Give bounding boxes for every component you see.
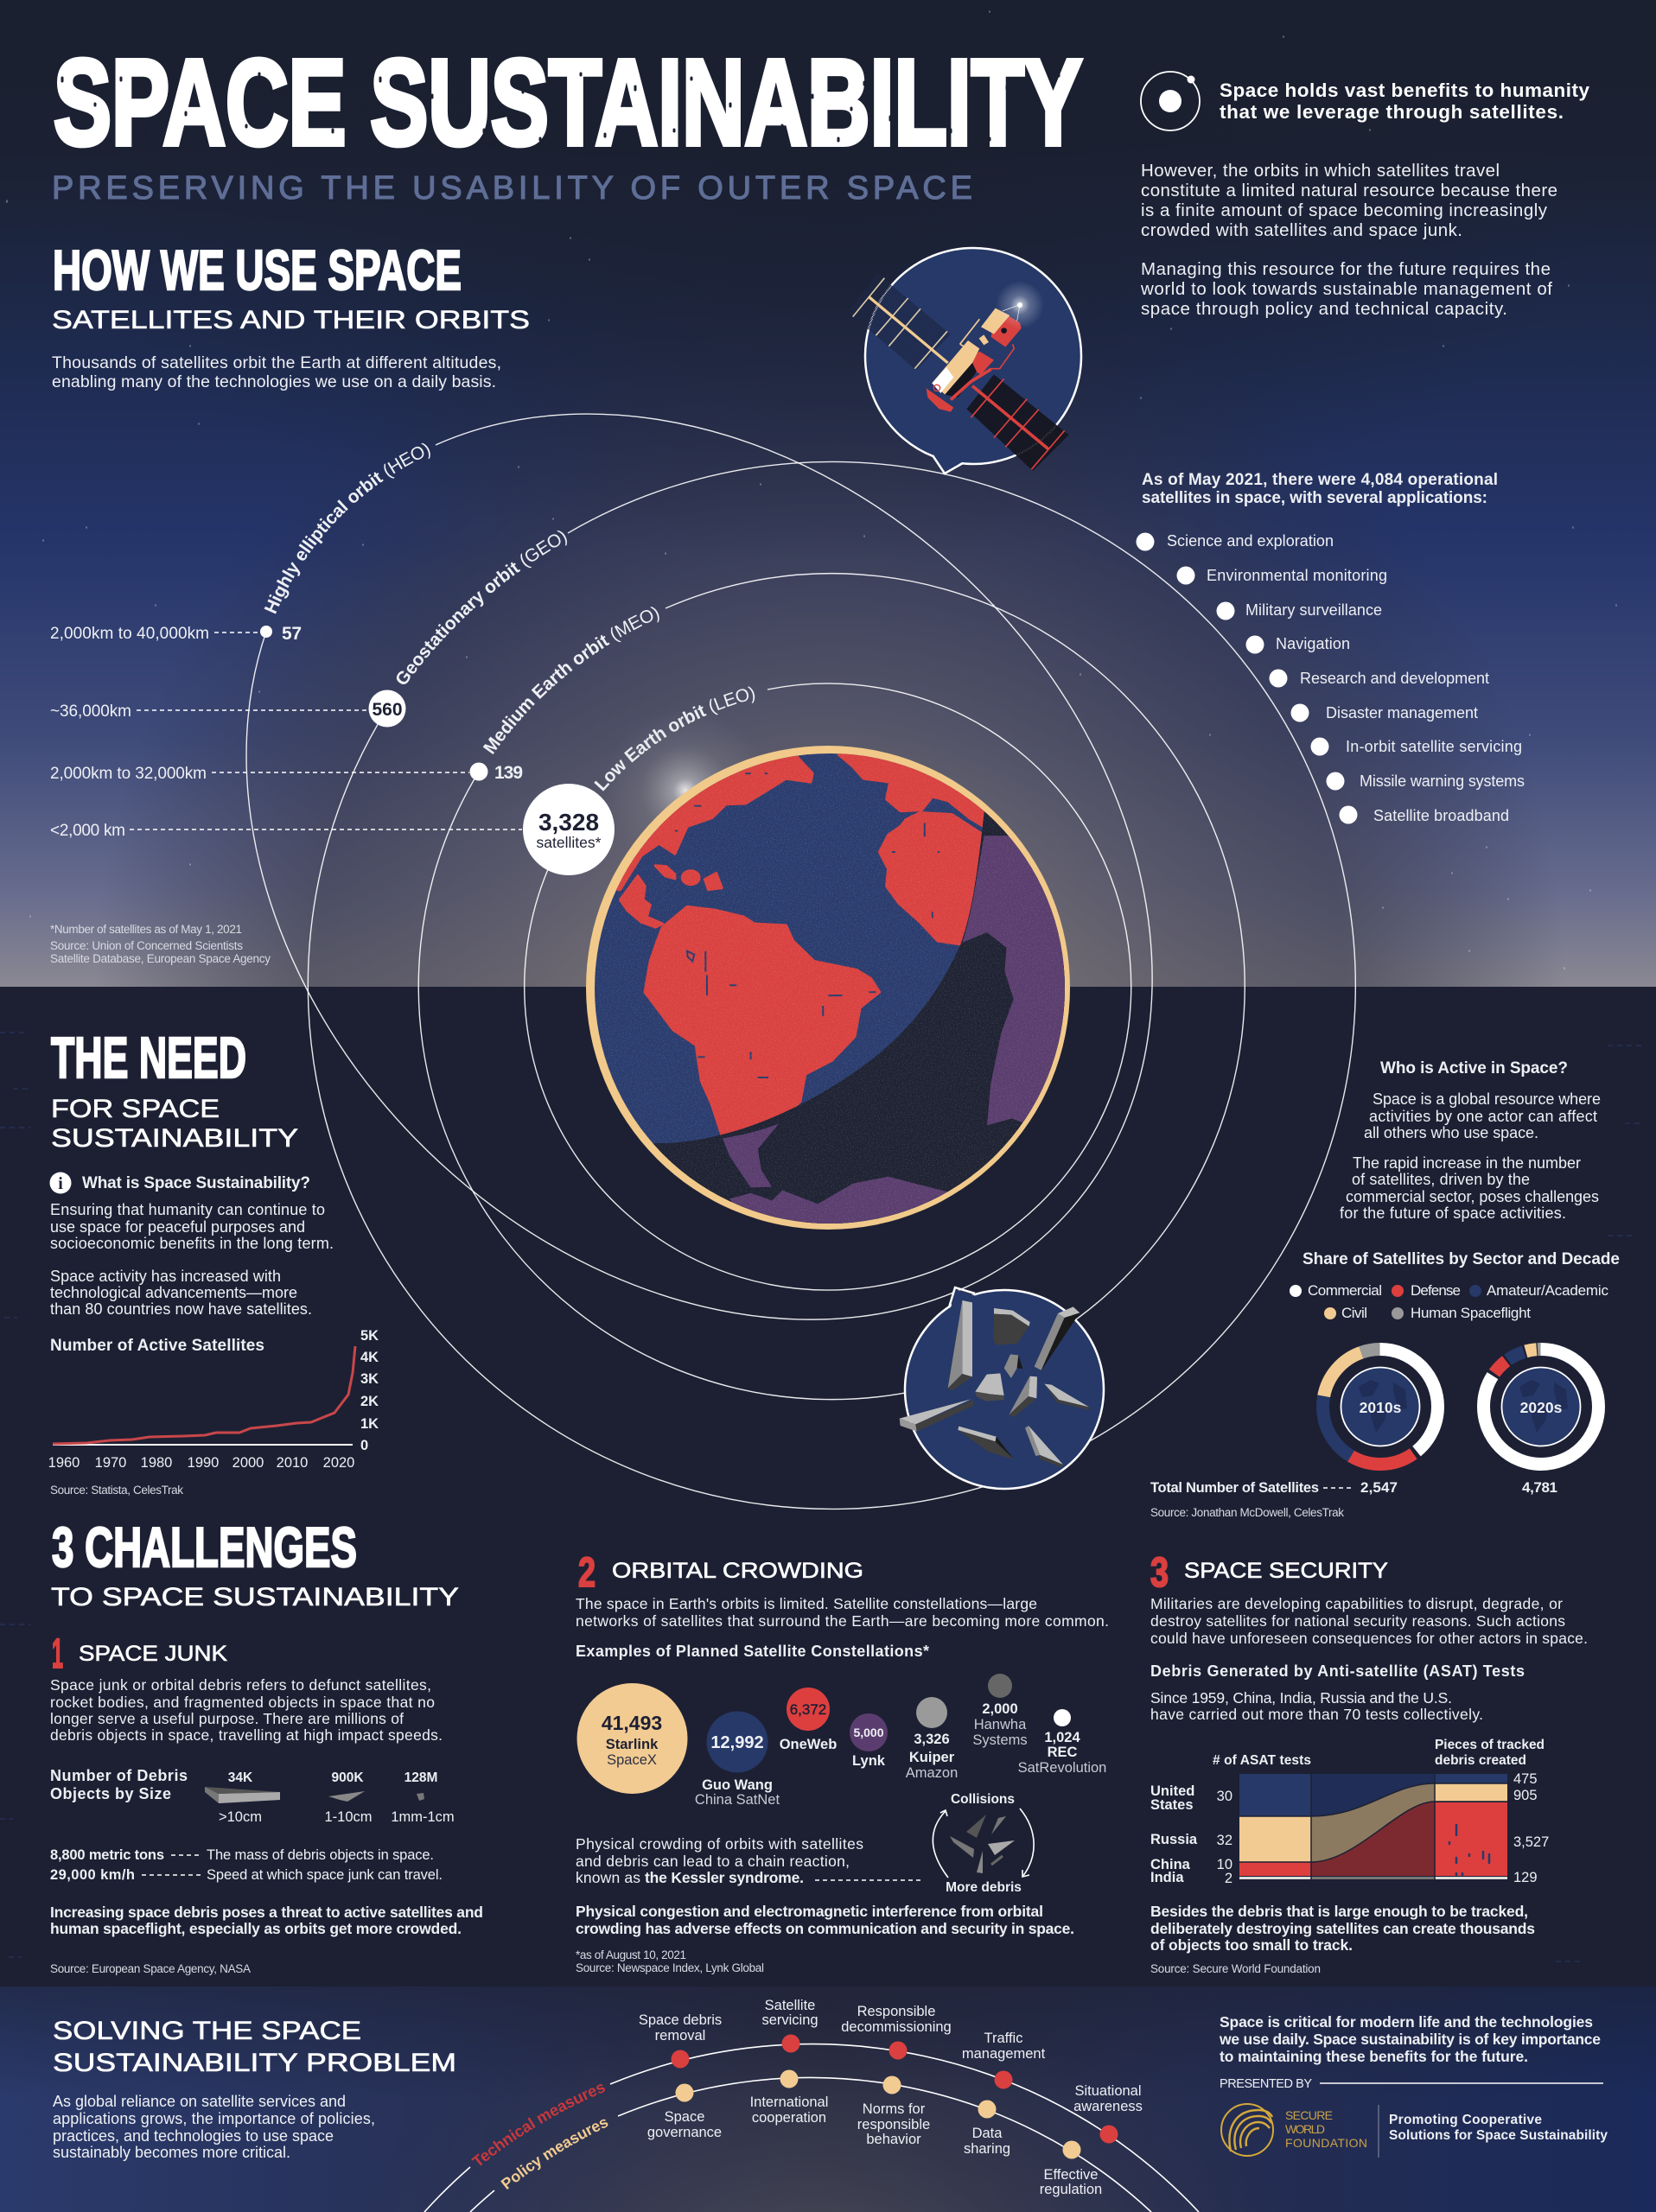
earth globe <box>586 743 1089 1242</box>
sankey chart: asat tests to debris: 905 <box>1513 1788 1538 1803</box>
bubble chart: planned constellations: SatRevolution <box>1018 1760 1106 1776</box>
closing statement <box>1219 2013 1601 2065</box>
diagram: technical and policy measures arcs: removal <box>655 2028 705 2044</box>
sankey chart: asat tests to debris: China <box>1150 1857 1191 1872</box>
panel: space junk: 128M <box>404 1770 437 1785</box>
donut legend: Civil <box>1341 1305 1367 1321</box>
applications list heading: As of May 2021, there were 4,084 operational <box>1142 471 1498 489</box>
bubble chart: planned constellations: 1,024 <box>1044 1730 1080 1745</box>
altitude labels and leader lines: 2,000km to 40,000km <box>50 625 209 643</box>
panel: space junk: Source: European Space Agency, NASA <box>50 1962 251 1975</box>
text: solving intro: As global reliance on satellite services and <box>53 2093 346 2110</box>
panel: space junk: 34K <box>228 1770 253 1785</box>
intro paragraph two: world to look towards sustainable management of <box>1140 279 1552 299</box>
line chart: number of active satellites: 1K <box>360 1416 379 1432</box>
text: solving intro: sustainably becomes more critical. <box>53 2144 290 2161</box>
bubble chart: planned constellations: OneWeb <box>780 1737 837 1752</box>
applications list heading <box>1142 471 1498 507</box>
orbit labels along rings: Geostationary orbit (GEO) <box>396 531 567 684</box>
panel: orbital crowding: Physical crowding of orbits with satellites <box>576 1835 863 1853</box>
panel: orbital crowding <box>576 1550 1109 1974</box>
line chart: number of active satellites: 5K <box>360 1328 379 1344</box>
orbit satellite counts: 3,328 <box>538 809 599 836</box>
bubble chart: planned constellations: Systems <box>972 1732 1028 1748</box>
bubble chart: planned constellations: SpaceX <box>607 1752 657 1768</box>
text: how we use space intro: enabling many of the technologies we use on a daily basis. <box>52 372 496 391</box>
line chart: number of active satellites: 2K <box>360 1394 379 1409</box>
panel: space junk: debris objects in space, travelling at high impact speeds. <box>50 1726 443 1744</box>
panel: space security: Besides the debris that is large enough to be tracked, <box>1150 1903 1528 1920</box>
diagram: technical and policy measures arcs: Space debris <box>639 2012 722 2028</box>
intro paragraph one: However, the orbits in which satellites travel <box>1141 161 1500 181</box>
source note: orbits: Source: Union of Concerned Scientists <box>50 939 243 952</box>
intro paragraph two: space through policy and technical capacity. <box>1141 299 1507 319</box>
diagram: technical and policy measures arcs: Norms for <box>863 2101 926 2117</box>
orbit satellite counts: 57 <box>282 624 302 644</box>
text: who is active in space: all others who use space. <box>1364 1124 1538 1141</box>
bubble chart: planned constellations: 5,000 <box>853 1726 884 1739</box>
orbit satellite counts: satellites* <box>537 834 602 851</box>
subheading: for space sustainability <box>51 1095 298 1153</box>
panel: space junk: 900K <box>331 1770 364 1785</box>
sankey chart: asat tests to debris: 32 <box>1217 1833 1232 1848</box>
orbit labels along rings: Low Earth orbit (LEO) <box>594 686 755 791</box>
icon: satellite <box>849 274 1069 471</box>
text: how we use space intro: Thousands of satellites orbit the Earth at different altitudes, <box>52 353 501 372</box>
text: what is space sustainability <box>50 1174 334 1318</box>
sankey chart: asat tests to debris: 2 <box>1225 1871 1232 1886</box>
panel: space junk: Increasing space debris poses a threat to active satellites and <box>50 1904 483 1921</box>
bubble chart: planned constellations: 41,493 <box>602 1712 662 1734</box>
text: solving intro <box>53 2093 375 2161</box>
source: sector share: Source: Jonathan McDowell, CelesTrak <box>1150 1506 1344 1519</box>
donut legend: Amateur/Academic <box>1487 1282 1609 1299</box>
text: who is active in space: for the future of space activities. <box>1340 1205 1566 1222</box>
sankey chart: asat tests to debris: # of ASAT tests <box>1213 1753 1311 1768</box>
intro statement <box>1220 79 1589 123</box>
earth glow <box>603 709 767 873</box>
logo: secure world foundation: Promoting Cooperative <box>1389 2113 1542 2127</box>
panel: space security: have carried out more than 70 tests collectively. <box>1150 1706 1483 1723</box>
donut chart: 2010s <box>1322 1350 1438 1464</box>
line chart: number of active satellites: 2000 <box>232 1455 264 1471</box>
presented by: PRESENTED BY <box>1220 2077 1312 2091</box>
closing statement: Space is critical for modern life and the technologies <box>1220 2013 1593 2031</box>
panel: space junk: Number of Debris <box>50 1767 188 1784</box>
applications list: Navigation <box>1276 635 1350 652</box>
subheading: for space sustainability: SUSTAINABILITY <box>51 1124 298 1153</box>
diagram: technical and policy measures arcs: servicing <box>761 2012 818 2028</box>
line chart: number of active satellites: 3K <box>360 1371 379 1387</box>
subheading: for space sustainability: FOR SPACE <box>51 1095 220 1123</box>
intro statement: that we leverage through satellites. <box>1220 101 1564 123</box>
satellite bubble <box>849 248 1081 474</box>
applications list heading: satellites in space, with several applications: <box>1142 489 1487 507</box>
text: how we use space intro <box>52 353 501 391</box>
diagram: technical and policy measures arcs: Situational <box>1074 2083 1142 2099</box>
panel: space junk: 1 <box>52 1631 63 1677</box>
applications list: Environmental monitoring <box>1207 567 1387 584</box>
line chart: number of active satellites: 1990 <box>188 1455 219 1471</box>
text: what is space sustainability: Space activity has increased with <box>50 1268 281 1285</box>
diagram: technical and policy measures arcs: awareness <box>1073 2099 1143 2114</box>
panel: orbital crowding: Physical congestion and electromagnetic interference from orbital <box>576 1903 1043 1920</box>
line chart: number of active satellites: Number of Active Satellites <box>50 1337 264 1355</box>
sankey chart: asat tests to debris: Pieces of tracked <box>1435 1738 1545 1752</box>
diagram: technical and policy measures arcs: Technical measures <box>471 2084 605 2165</box>
bubble chart: planned constellations: Starlink <box>606 1737 659 1752</box>
orbit rings <box>246 414 1355 1509</box>
bubble chart: planned constellations: 2,000 <box>982 1701 1018 1717</box>
diagram: technical and policy measures arcs: International <box>750 2094 828 2110</box>
diagram: technical and policy measures arcs: governance <box>647 2125 722 2140</box>
diagram: technical and policy measures arcs: sharing <box>964 2141 1010 2157</box>
intro paragraph two: Managing this resource for the future requires the <box>1141 259 1551 279</box>
bubble chart: planned constellations: Lynk <box>852 1753 886 1769</box>
text: who is active in space <box>1340 1059 1601 1222</box>
donut chart: 2020s: 2020s <box>1520 1399 1563 1416</box>
text: what is space sustainability: socioeconomic benefits in the long term. <box>50 1235 334 1252</box>
orbit labels along rings <box>264 442 755 791</box>
panel: orbital crowding: the Kessler syndrome. <box>645 1869 804 1886</box>
sankey chart: asat tests to debris: States <box>1150 1797 1194 1813</box>
logo: secure world foundation: SECURE <box>1285 2108 1333 2122</box>
diagram: kessler syndrome cycle: Collisions <box>951 1792 1015 1807</box>
sankey chart: asat tests to debris: 3,527 <box>1513 1834 1549 1850</box>
bubble chart: planned constellations <box>577 1674 1106 1808</box>
donut legend: Commercial <box>1308 1282 1382 1299</box>
text: solving intro: applications grows, the importance of policies, <box>53 2110 375 2127</box>
panel: space junk: Speed at which space junk can travel. <box>207 1867 443 1883</box>
source note: orbits: *Number of satellites as of May 1, 2021 <box>50 923 242 936</box>
heading: solving the space sustainability problem: SUSTAINABILITY PROBLEM <box>53 2049 456 2077</box>
panel: space junk: rocket bodies, and fragmented objects in space that no <box>50 1694 435 1711</box>
bubble chart: planned constellations: Hanwha <box>974 1717 1027 1732</box>
sankey chart: asat tests to debris: 475 <box>1513 1771 1538 1787</box>
intro paragraph one: is a finite amount of space becoming increasingly <box>1141 200 1548 220</box>
text: what is space sustainability: use space for peaceful purposes and <box>50 1218 305 1236</box>
icon: info <box>50 1172 71 1194</box>
source note: orbits <box>50 923 271 965</box>
panel: space security <box>1150 1550 1588 1975</box>
donut legend: Human Spaceflight <box>1411 1305 1531 1321</box>
orbit labels along rings: Medium Earth orbit (MEO) <box>482 607 659 754</box>
diagram: technical and policy measures arcs <box>424 1998 1200 2212</box>
panel: space security: Since 1959, China, India, Russia and the U.S. <box>1150 1689 1452 1707</box>
panel: orbital crowding: Examples of Planned Satellite Constellations* <box>576 1643 929 1660</box>
panel: space junk: 29,000 km/h <box>50 1867 135 1883</box>
diagram: technical and policy measures arcs: behavior <box>866 2132 921 2147</box>
total number of satellites: 2,547 <box>1360 1479 1398 1496</box>
applications list: Military surveillance <box>1245 601 1382 619</box>
bubble chart: planned constellations: 3,326 <box>914 1732 950 1747</box>
diagram: technical and policy measures arcs: Space <box>665 2109 704 2125</box>
text: who is active in space: Who is Active in Space? <box>1380 1059 1568 1077</box>
panel: orbital crowding: Source: Newspace Index, Lynk Global <box>576 1961 764 1974</box>
bubble chart: planned constellations: Guo Wang <box>702 1777 773 1793</box>
sankey chart: asat tests to debris: United <box>1150 1783 1194 1799</box>
panel: orbital crowding: known as <box>576 1869 640 1886</box>
subtitle: PRESERVING THE USABILITY OF OUTER SPACE <box>52 170 972 207</box>
panel: orbital crowding: *as of August 10, 2021 <box>576 1948 686 1961</box>
sankey chart: asat tests to debris: 10 <box>1217 1857 1232 1872</box>
bubble chart: planned constellations: China SatNet <box>695 1792 780 1808</box>
donut legend: Defense <box>1411 1282 1461 1299</box>
panel: space security: Militaries are developing capabilities to disrupt, degrade, or <box>1150 1595 1563 1612</box>
heading: how we use space: HOW WE USE SPACE <box>53 238 462 302</box>
icon: debris shards <box>900 1300 1089 1467</box>
bubble chart: planned constellations: Kuiper <box>909 1750 955 1765</box>
diagram: technical and policy measures arcs: Effective <box>1044 2167 1098 2183</box>
altitude labels and leader lines: ~36,000km <box>50 702 131 721</box>
panel: space security: could have unforeseen consequences for other actors in space. <box>1150 1630 1588 1647</box>
diagram: kessler syndrome cycle <box>933 1792 1034 1895</box>
line chart: number of active satellites: 4K <box>360 1350 379 1365</box>
text: what is space sustainability: than 80 countries now have satellites. <box>50 1300 312 1318</box>
diagram: technical and policy measures arcs: management <box>962 2046 1046 2062</box>
total number of satellites: Total Number of Satellites <box>1150 1480 1319 1496</box>
panel: space junk: longer serve a useful purpose. There are millions of <box>50 1710 404 1727</box>
intro paragraph two <box>1140 259 1552 319</box>
logo: secure world foundation: WORLD <box>1285 2122 1325 2136</box>
title: SPACE SUSTAINABILITY <box>54 34 1082 170</box>
panel: space security: destroy satellites for national security reasons. Such actions <box>1150 1612 1565 1630</box>
sankey chart: asat tests to debris: Russia <box>1150 1832 1198 1847</box>
panel: space junk <box>50 1631 483 1975</box>
text: solving intro: practices, and technologies to use space <box>53 2127 334 2145</box>
panel: space security: 3 <box>1150 1550 1169 1596</box>
intro icon: orbit <box>1141 72 1200 130</box>
panel: orbital crowding: networks of satellites that surround the Earth—are becoming more common. <box>576 1612 1109 1630</box>
applications list: In-orbit satellite servicing <box>1346 738 1522 755</box>
applications list: Disaster management <box>1326 704 1478 721</box>
heading: solving the space sustainability problem <box>53 2017 456 2077</box>
panel: orbital crowding: ORBITAL CROWDING <box>612 1559 863 1583</box>
panel: space security: Source: Secure World Foundation <box>1150 1962 1321 1975</box>
logo: secure world foundation: FOUNDATION <box>1285 2136 1367 2150</box>
panel: space junk: human spaceflight, especially as orbits get more crowded. <box>50 1920 462 1937</box>
closing statement: we use daily. Space sustainability is of key importance <box>1219 2031 1601 2048</box>
panel: space junk: Space junk or orbital debris refers to defunct satellites, <box>50 1676 431 1694</box>
line chart: number of active satellites: 1980 <box>141 1455 172 1471</box>
applications list: Missile warning systems <box>1360 772 1525 790</box>
sankey chart: asat tests to debris: debris created <box>1435 1753 1526 1768</box>
heading: the need: THE NEED <box>51 1026 246 1090</box>
bubble chart: planned constellations: 12,992 <box>710 1733 764 1752</box>
text: who is active in space: Space is a global resource where <box>1373 1090 1601 1108</box>
panel: space security: deliberately destroying satellites can create thousands <box>1150 1920 1535 1937</box>
panel: space security: of objects too small to track. <box>1150 1936 1353 1954</box>
subheading: to space sustainability: TO SPACE SUSTAINABILITY <box>51 1583 459 1611</box>
text: who is active in space: activities by one actor can affect <box>1369 1108 1597 1125</box>
line chart: number of active satellites <box>48 1328 379 1471</box>
sankey chart: asat tests to debris: 129 <box>1513 1870 1538 1885</box>
subheading: satellites and their orbits: SATELLITES AND THEIR ORBITS <box>52 306 530 334</box>
donut chart: 2010s: 2010s <box>1360 1399 1402 1416</box>
diagram: technical and policy measures arcs: cooperation <box>752 2110 826 2126</box>
icon: info: i <box>58 1174 63 1193</box>
total number of satellites <box>1150 1479 1557 1496</box>
sankey chart: asat tests to debris: 30 <box>1217 1789 1232 1804</box>
orbit satellite counts: 560 <box>372 700 403 720</box>
diagram: technical and policy measures arcs: Policy measures <box>500 2119 608 2190</box>
heading: solving the space sustainability problem: SOLVING THE SPACE <box>53 2017 361 2045</box>
source: active satellites: Source: Statista, CelesTrak <box>50 1484 183 1497</box>
diagram: technical and policy measures arcs: regulation <box>1040 2182 1102 2197</box>
panel: space junk: The mass of debris objects in space. <box>207 1847 434 1863</box>
panel: space junk: 1-10cm <box>324 1809 373 1825</box>
orbit satellite counts: 139 <box>494 763 523 783</box>
line chart: number of active satellites: 1960 <box>48 1455 80 1471</box>
panel: orbital crowding: crowding has adverse effects on communication and security in space. <box>576 1920 1074 1937</box>
panel: space junk: >10cm <box>219 1809 262 1825</box>
panel: orbital crowding: The space in Earth's orbits is limited. Satellite constellations—large <box>576 1595 1037 1612</box>
bubble chart: planned constellations: 6,372 <box>790 1701 826 1718</box>
panel: space junk: 8,800 metric tons <box>50 1847 164 1863</box>
diagram: kessler syndrome cycle: More debris <box>946 1880 1022 1895</box>
bubble chart: planned constellations: Amazon <box>906 1765 958 1781</box>
logo: secure world foundation: Solutions for Space Sustainability <box>1389 2128 1608 2143</box>
applications list <box>1136 532 1525 824</box>
panel: space security: Debris Generated by Anti-satellite (ASAT) Tests <box>1150 1662 1525 1680</box>
panel: orbital crowding: 2 <box>578 1550 596 1596</box>
heading: share of satellites: Share of Satellites by Sector and Decade <box>1303 1250 1620 1268</box>
debris bubble <box>900 1287 1104 1489</box>
panel: orbital crowding: and debris can lead to a chain reaction, <box>576 1853 850 1870</box>
altitude labels and leader lines: <2,000 km <box>50 822 125 840</box>
line chart: number of active satellites: 2020 <box>323 1455 354 1471</box>
panel: space junk: SPACE JUNK <box>79 1642 227 1666</box>
panel: space junk: Objects by Size <box>50 1785 171 1802</box>
line chart: number of active satellites: 0 <box>360 1438 368 1453</box>
diagram: technical and policy measures arcs: Satellite <box>765 1998 815 2013</box>
intro paragraph one: constitute a limited natural resource because there <box>1141 181 1557 200</box>
altitude labels and leader lines: 2,000km to 32,000km <box>50 765 207 783</box>
intro paragraph one: crowded with satellites and space junk. <box>1141 220 1462 240</box>
sankey chart: asat tests to debris <box>1150 1738 1549 1886</box>
text: what is space sustainability: technological advancements—more <box>50 1284 297 1301</box>
diagram: technical and policy measures arcs: responsible <box>857 2117 930 2133</box>
closing statement: to maintaining these benefits for the future. <box>1220 2048 1528 2065</box>
orbit labels along rings: Highly elliptical orbit (HEO) <box>264 442 430 613</box>
text: what is space sustainability: Ensuring that humanity can continue to <box>50 1201 325 1218</box>
total number of satellites: 4,781 <box>1522 1479 1557 1496</box>
heading: 3 challenges: 3 CHALLENGES <box>52 1516 357 1579</box>
text: who is active in space: of satellites, driven by the <box>1352 1171 1530 1188</box>
source note: orbits: Satellite Database, European Space Agency <box>50 952 271 965</box>
panel: space junk: 1mm-1cm <box>391 1809 455 1825</box>
sankey chart: asat tests to debris: India <box>1150 1870 1184 1885</box>
intro paragraph one <box>1141 161 1557 240</box>
donut chart: 2020s <box>1483 1350 1599 1464</box>
donut legend <box>1290 1282 1609 1321</box>
diagram: technical and policy measures arcs: Traffic <box>984 2031 1022 2046</box>
line chart: number of active satellites: 1970 <box>95 1455 126 1471</box>
logo: secure world foundation <box>1221 2104 1608 2158</box>
diagram: technical and policy measures arcs: Responsible <box>857 2004 935 2019</box>
text: what is space sustainability: What is Space Sustainability? <box>82 1174 310 1192</box>
applications list: Science and exploration <box>1167 532 1334 550</box>
line chart: number of active satellites: 2010 <box>277 1455 308 1471</box>
text: who is active in space: The rapid increase in the number <box>1353 1154 1581 1172</box>
altitude labels and leader lines <box>50 625 522 840</box>
panel: space security: SPACE SECURITY <box>1184 1559 1388 1583</box>
diagram: technical and policy measures arcs: decommissioning <box>841 2019 952 2035</box>
applications list: Satellite broadband <box>1373 807 1509 824</box>
intro statement: Space holds vast benefits to humanity <box>1220 79 1589 101</box>
applications list: Research and development <box>1300 670 1489 687</box>
bubble chart: planned constellations: REC <box>1048 1745 1077 1760</box>
orbit satellite counts <box>260 624 615 875</box>
diagram: technical and policy measures arcs: Data <box>972 2126 1003 2141</box>
text: who is active in space: commercial sector, poses challenges <box>1346 1188 1599 1205</box>
